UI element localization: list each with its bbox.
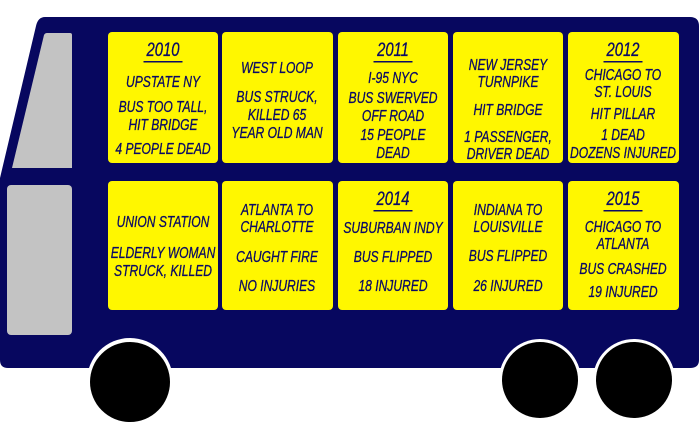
window panel: 2011 I-95 NYC: 2011 [376,39,409,60]
window panel: new jersey turnpike: TURNPIKE [477,73,539,90]
window panel: new jersey turnpike: DRIVER DEAD [467,145,549,162]
window panel: 2010 upstate NY: BUS TOO TALL, [119,98,207,115]
window panel: new jersey turnpike: HIT BRIDGE [473,101,543,118]
window panel: 2011 I-95 NYC: 15 PEOPLE [360,126,426,143]
window panel: new jersey turnpike [453,32,563,163]
window panel: indiana to louisville: LOUISVILLE [473,218,543,235]
window panel: 2012 chicago to st louis: ST. LOUIS [594,83,652,100]
window panel: 2014 suburban indy: 18 INJURED [358,277,428,294]
window panel: 2011 I-95 NYC: I-95 NYC [368,69,419,86]
window panel: union station: STRUCK, KILLED [114,262,212,279]
window panel: 2012 chicago to st louis: 1 DEAD [601,126,645,143]
window panel: 2011 I-95 NYC: BUS SWERVED [349,89,437,106]
window panel: union station: ELDERLY WOMAN [111,244,216,261]
windshield [12,33,72,168]
window panel: 2014 suburban indy: 2014 [376,188,409,209]
wheel arches [87,338,173,424]
window panel: 2014 suburban indy [338,181,448,310]
window panel: 2010 upstate NY: HIT BRIDGE [128,116,198,133]
window panel: 2014 suburban indy: SUBURBAN INDY [343,219,444,236]
window panel: 2015 chicago to atlanta: 19 INJURED [588,283,658,300]
window panel: indiana to louisville: BUS FLIPPED [469,247,547,264]
window panel: 2012 chicago to st louis: DOZENS INJURED [570,144,676,161]
window panel: atlanta to charlotte: NO INJURIES [239,277,316,294]
window panel: 2010 upstate NY: UPSTATE NY [126,73,202,90]
window panel: atlanta to charlotte: CHARLOTTE [240,218,314,235]
window panel: 2010 upstate NY: 2010 [146,39,180,60]
window panel: new jersey turnpike: NEW JERSEY [469,56,549,73]
window panel: 2015 chicago to atlanta [568,181,679,310]
window panel: west loop: YEAR OLD MAN [231,124,323,141]
window panel: 2015 chicago to atlanta: 2015 [606,188,640,209]
window panel: indiana to louisville: 26 INJURED [473,277,543,294]
side window [7,185,72,335]
window panel: west loop [222,32,333,163]
window panel: union station: UNION STATION [117,213,210,230]
window panel: new jersey turnpike: 1 PASSENGER, [464,128,552,145]
window panel: west loop: BUS STRUCK, [236,88,318,105]
window panel: atlanta to charlotte [222,181,333,310]
window panel: 2012 chicago to st louis: CHICAGO TO [585,66,661,83]
window panel: 2010 upstate NY: 4 PEOPLE DEAD [115,140,211,157]
window panel: indiana to louisville: INDIANA TO [474,201,542,218]
window panel: union station [108,181,218,310]
window panel: 2011 I-95 NYC [338,32,448,163]
window panel: 2015 chicago to atlanta: CHICAGO TO [585,218,661,235]
window panel: 2012 chicago to st louis: HIT PILLAR [591,105,655,122]
window panel: 2010 upstate NY [108,32,218,163]
window panel: 2015 chicago to atlanta: ATLANTA [596,235,649,252]
window panel: atlanta to charlotte: ATLANTA TO [240,201,313,218]
window panel: atlanta to charlotte: CAUGHT FIRE [236,248,319,265]
window panel: 2012 chicago to st louis: 2012 [606,39,640,60]
window panel: west loop: WEST LOOP [241,59,314,76]
window panel: 2011 I-95 NYC: OFF ROAD [362,107,424,124]
window panel: indiana to louisville [453,181,563,310]
window panel: 2015 chicago to atlanta: BUS CRASHED [579,260,667,277]
wheels [90,342,672,422]
window panel: west loop: KILLED 65 [248,106,306,123]
window panel: 2011 I-95 NYC: DEAD [376,144,410,161]
window panel: 2014 suburban indy: BUS FLIPPED [354,248,432,265]
window panel: 2012 chicago to st louis [568,32,679,163]
